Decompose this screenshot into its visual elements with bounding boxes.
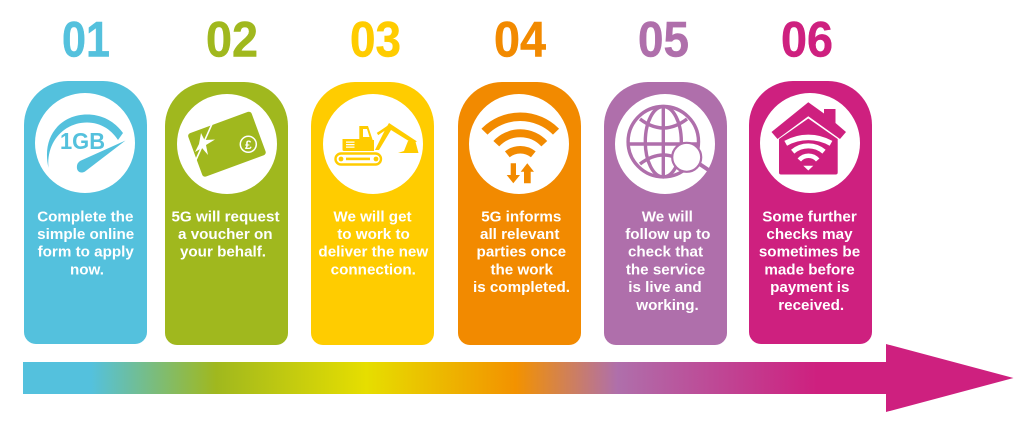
icon: wifi with up and down arrows xyxy=(469,94,569,194)
step 6 text: checks may xyxy=(766,226,853,243)
step 4 text: all relevant xyxy=(480,226,559,243)
step number 02: 02 xyxy=(206,12,258,68)
card background xyxy=(24,81,147,344)
step 3 text: deliver the new xyxy=(318,244,428,261)
step 5 text: working. xyxy=(635,297,699,314)
step 5 text: is live and xyxy=(628,279,702,296)
step 1 text: now. xyxy=(70,261,104,278)
step 3 text: to work to xyxy=(337,226,410,243)
step 3 text: connection. xyxy=(331,261,416,278)
icon: globe with magnifying glass xyxy=(615,94,715,194)
step 6 text: made before xyxy=(764,261,855,278)
step 4 text: 5G informs xyxy=(481,208,561,225)
step 6 text: received. xyxy=(778,297,844,314)
step 4 text: parties once xyxy=(477,244,566,261)
arrow: gradient timeline xyxy=(23,344,1014,412)
step 6 text: payment is xyxy=(770,279,849,296)
panel: step 5 xyxy=(604,12,727,345)
step 5 text: the service xyxy=(626,261,705,278)
card background xyxy=(458,82,581,345)
card background xyxy=(604,82,727,345)
icon: excavator xyxy=(323,94,423,194)
icon: 1GB speed gauge xyxy=(35,93,135,193)
step 1 text: Complete the xyxy=(37,208,133,225)
step 5 text: We will xyxy=(642,208,693,225)
step 2 text: 5G will request xyxy=(171,208,280,225)
step 3 text: We will get xyxy=(333,208,412,225)
card background xyxy=(749,81,872,344)
step 5 text: check that xyxy=(628,244,703,261)
panel: step 3 xyxy=(311,12,434,345)
card background xyxy=(311,82,434,345)
step 4 text: is completed. xyxy=(473,279,570,296)
panel: step 4 xyxy=(458,12,581,345)
step number 06: 06 xyxy=(781,12,833,68)
panel: step 2 xyxy=(165,12,288,345)
step number 01: 01 xyxy=(62,12,110,68)
step number 04: 04 xyxy=(494,12,546,68)
step number 05: 05 xyxy=(638,12,689,68)
step 1 text: simple online xyxy=(37,226,134,243)
step 1 text: form to apply xyxy=(38,244,134,261)
step 2 text: your behalf. xyxy=(180,244,266,261)
icon: house with wifi xyxy=(760,93,860,193)
icon: gift voucher card: £ xyxy=(245,138,252,152)
icon: gift voucher card xyxy=(177,94,277,194)
step number 03: 03 xyxy=(350,12,401,68)
step 6 text: Some further xyxy=(762,208,857,225)
card background xyxy=(165,82,288,345)
step 2 text: a voucher on xyxy=(178,226,273,243)
step 5 text: follow up to xyxy=(625,226,710,243)
panel: step 1 xyxy=(24,12,147,344)
step 4 text: the work xyxy=(490,261,553,278)
panel: step 6 xyxy=(749,12,872,344)
step 6 text: sometimes be xyxy=(759,244,860,261)
icon: 1GB speed gauge: 1GB xyxy=(60,128,105,154)
